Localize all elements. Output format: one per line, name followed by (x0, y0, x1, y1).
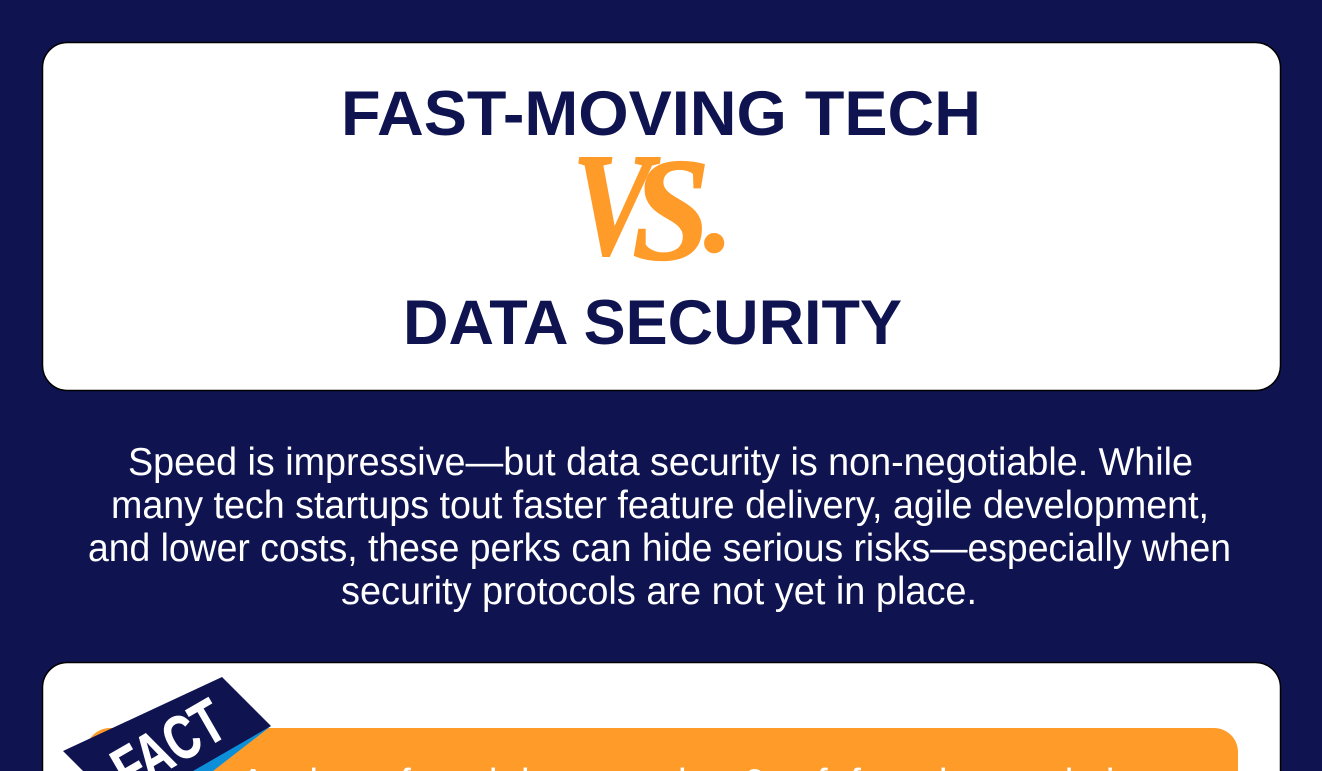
intro paragraph: many tech startups tout faster feature delivery, agile development, (111, 484, 1209, 527)
title: vs.: V (572, 123, 661, 286)
fact badge (63, 677, 271, 771)
title: fast-moving tech: FAST-MOVING TECH (341, 79, 981, 149)
title: vs. (572, 123, 733, 291)
panel: fact card (42, 662, 1280, 771)
intro paragraph: security protocols are not yet in place. (341, 570, 977, 613)
title: vs.: . (704, 149, 733, 276)
title: data security: DATA SECURITY (403, 288, 902, 358)
panel: title card (42, 42, 1280, 390)
intro paragraph: and lower costs, these perks can hide serious risks—especially when (88, 527, 1231, 570)
fact text (240, 762, 1126, 771)
title: vs.: S (632, 128, 710, 291)
intro paragraph: Speed is impressive—but data security is non-negotiable. While (128, 441, 1193, 484)
intro paragraph (88, 441, 1231, 613)
fact callout box (86, 728, 1238, 771)
